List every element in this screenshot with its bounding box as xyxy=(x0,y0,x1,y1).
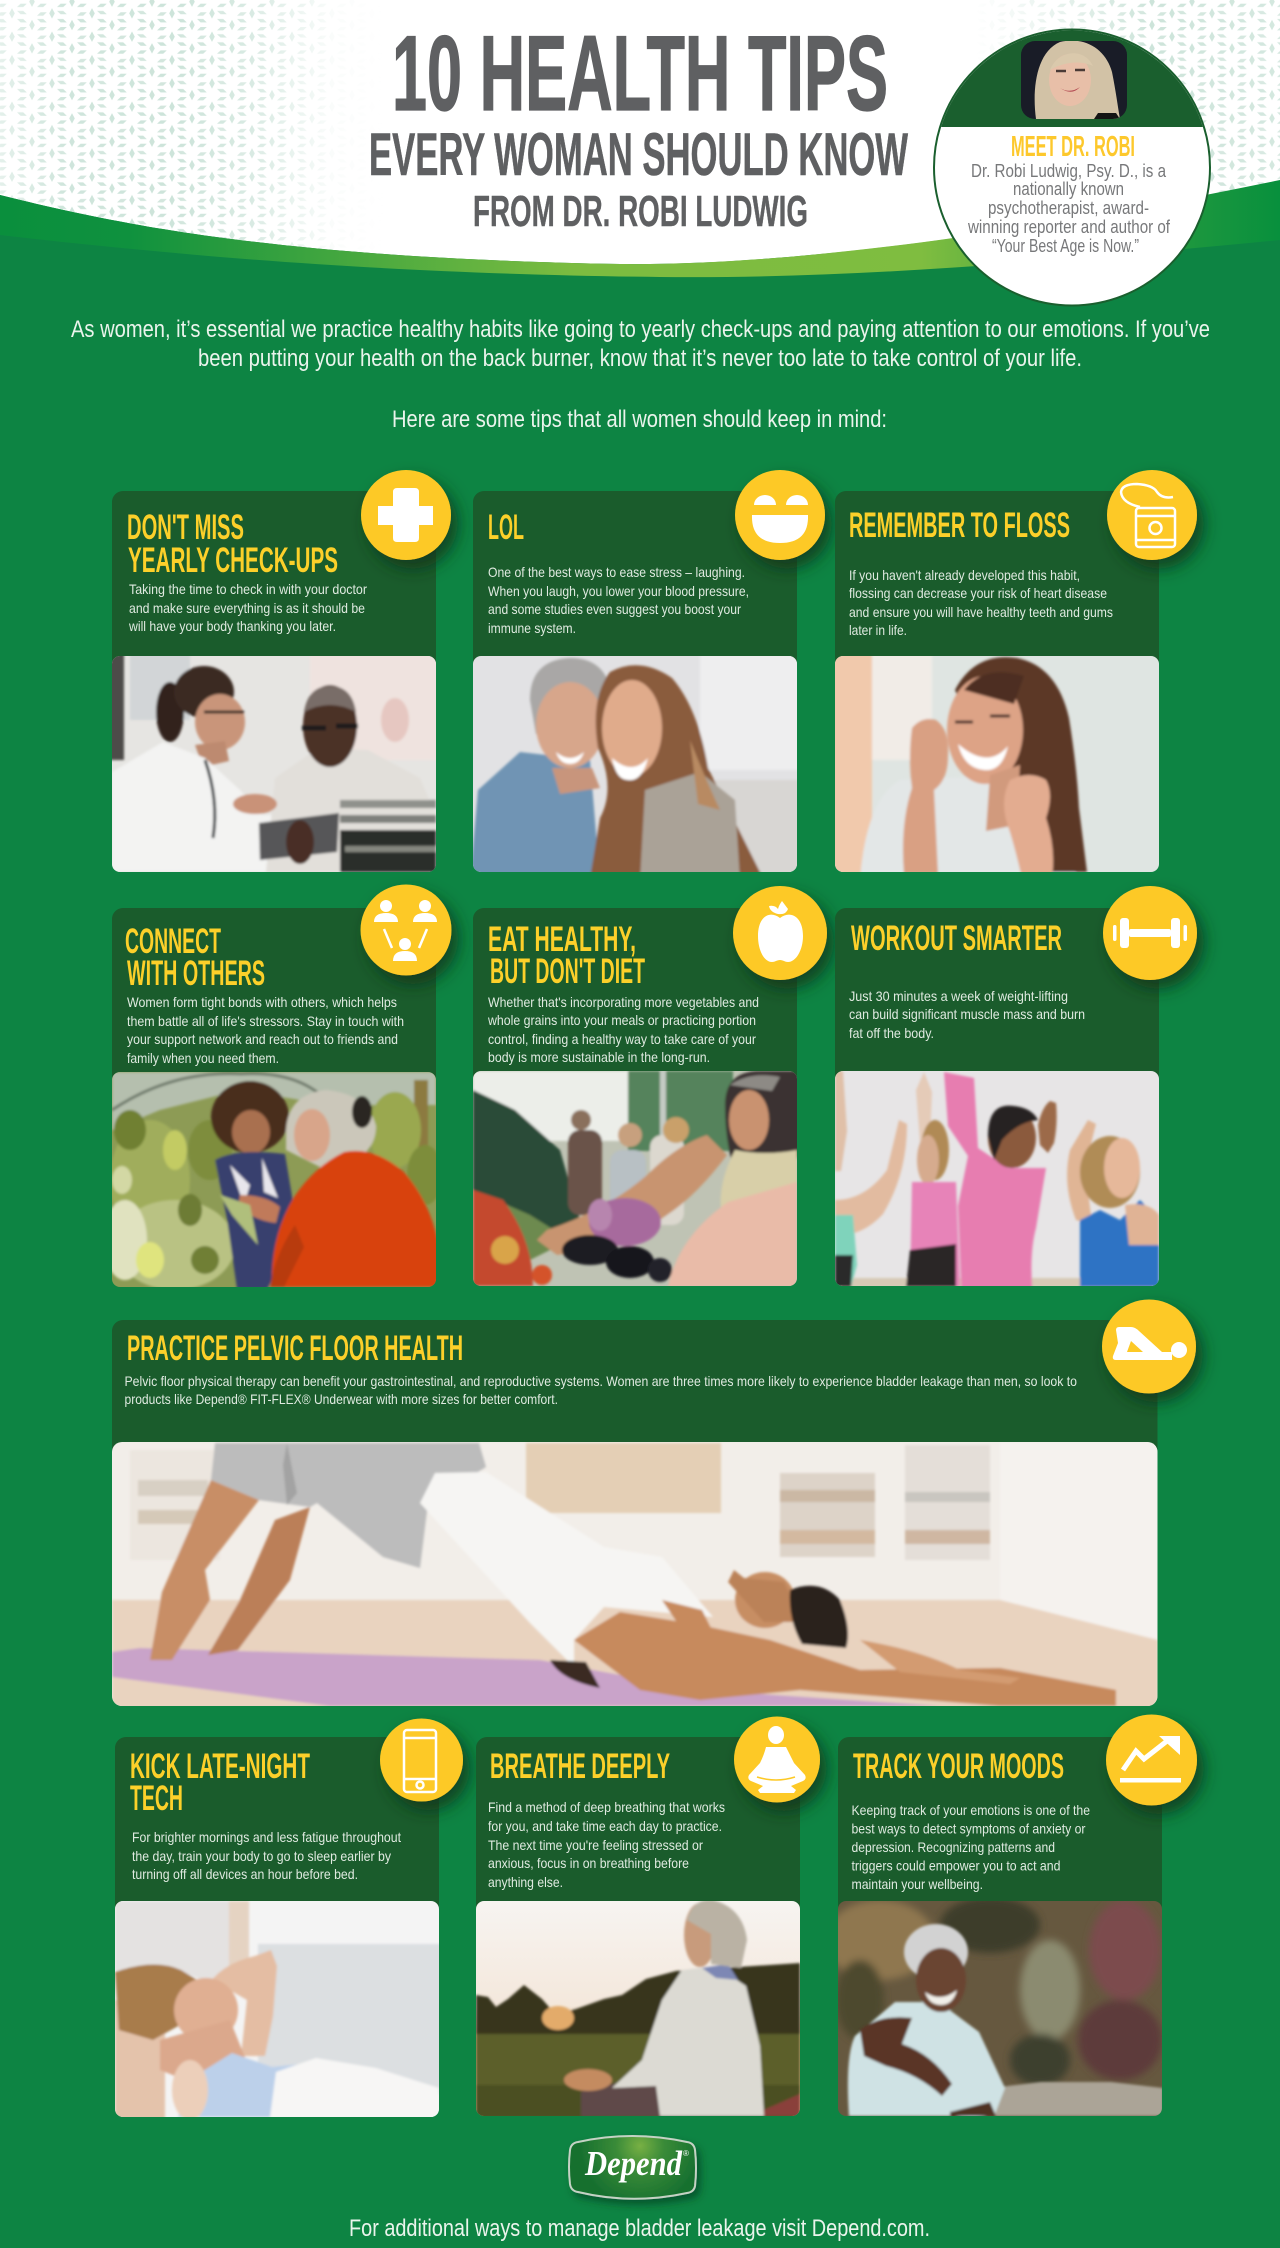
icon: smartphone xyxy=(380,1718,463,1802)
body text: Just 30 minutes a week of weight-lifting xyxy=(849,988,1068,1004)
body text: your support network and reach out to friends and xyxy=(127,1031,398,1047)
body text: anything else. xyxy=(488,1874,563,1890)
heading xyxy=(127,508,338,580)
heading: meet Dr. Robi: MEET DR. ROBI xyxy=(1011,131,1135,163)
body text: for you, and take time each day to practice. xyxy=(488,1818,722,1834)
intro text xyxy=(71,316,1210,433)
footer text: For additional ways to manage bladder leakage visit Depend.com. xyxy=(349,2215,930,2242)
photo: woman in bridge pose xyxy=(112,1442,1158,1710)
heading xyxy=(125,922,265,993)
icon: medical cross xyxy=(361,470,451,560)
heading xyxy=(130,1747,310,1818)
body text xyxy=(488,1799,725,1890)
photo: woman meditating at sunset xyxy=(476,1900,800,2119)
body text: The next time you're feeling stressed or xyxy=(488,1837,703,1853)
body text: family when you need them. xyxy=(127,1050,279,1066)
heading: YEARLY CHECK-UPS xyxy=(128,541,338,580)
heading: LOL xyxy=(488,508,524,547)
body text: them battle all of life's stressors. Stay in touch with xyxy=(127,1013,404,1029)
heading: PRACTICE PELVIC FLOOR HEALTH xyxy=(127,1329,463,1368)
panel: eat healthy xyxy=(473,886,827,1287)
photo: woman flossing xyxy=(830,650,1159,880)
body text: the day, train your body to go to sleep earlier by xyxy=(132,1848,391,1864)
body text: Women form tight bonds with others, which helps xyxy=(127,994,397,1010)
heading: KICK LATE-NIGHT xyxy=(130,1747,310,1786)
body text: and make sure everything is as it should be xyxy=(129,600,365,616)
body text xyxy=(849,988,1085,1041)
icon detail: head xyxy=(1171,1342,1187,1358)
body text: Pelvic floor physical therapy can benefit your gastrointestinal, and reproductive systems. Women are three times more likely to experience bladder leakage than men, so look to xyxy=(124,1373,1077,1389)
photo: farmers market vegetables xyxy=(473,1071,800,1287)
icon: connected people xyxy=(360,884,452,976)
photo: two women laughing xyxy=(470,650,800,880)
photo: smiling older woman xyxy=(825,1897,1163,2118)
heading: TECH xyxy=(130,1779,183,1818)
body text xyxy=(852,1802,1090,1892)
body text: control, finding a healthy way to take care of your xyxy=(488,1031,756,1047)
body text: and some studies even suggest you boost your xyxy=(488,601,741,617)
portrait photo xyxy=(1021,41,1127,119)
bio text: Dr. Robi Ludwig, Psy. D., is a xyxy=(971,161,1167,181)
body text: When you laugh, you lower your blood pressure, xyxy=(488,583,749,599)
body text: maintain your wellbeing. xyxy=(852,1876,983,1892)
bio text: psychotherapist, award- xyxy=(988,198,1149,218)
heading: TRACK YOUR MOODS xyxy=(853,1747,1064,1786)
bio text: winning reporter and author of xyxy=(967,217,1171,237)
intro text: been putting your health on the back burner, know that it’s never too late to take control of your life. xyxy=(198,345,1082,372)
body text: immune system. xyxy=(488,620,576,636)
heading: REMEMBER TO FLOSS xyxy=(849,506,1070,545)
panel: yearly check-ups xyxy=(106,470,451,872)
icon: rising chart xyxy=(1106,1714,1197,1806)
body text: For brighter mornings and less fatigue throughout xyxy=(132,1829,401,1845)
body text: fat off the body. xyxy=(849,1025,934,1041)
panel: connect with others xyxy=(103,884,452,1290)
heading: DON'T MISS xyxy=(127,508,244,547)
title xyxy=(369,13,908,236)
heading: BUT DON'T DIET xyxy=(490,952,645,991)
callout: meet Dr. Robi xyxy=(930,28,1215,306)
title: FROM DR. ROBI LUDWIG xyxy=(473,187,808,236)
body text xyxy=(127,994,404,1066)
body text: later in life. xyxy=(849,622,907,638)
logo: Depend: ® xyxy=(683,2149,689,2158)
body text: will have your body thanking you later. xyxy=(128,618,336,634)
body text: and ensure you will have healthy teeth and gums xyxy=(849,604,1113,620)
title: 10 HEALTH TIPS xyxy=(392,13,888,133)
icon: dumbbell xyxy=(1103,886,1197,980)
heading: CONNECT xyxy=(125,922,221,961)
header banner with pattern and wave xyxy=(0,0,1280,277)
title: EVERY WOMAN SHOULD KNOW xyxy=(369,121,908,188)
icon: floss container xyxy=(1107,470,1197,560)
body text: Keeping track of your emotions is one of the xyxy=(852,1802,1090,1818)
panel: pelvic floor health xyxy=(112,1300,1196,1710)
body text xyxy=(124,1373,1077,1407)
icon: apple xyxy=(733,886,827,980)
heading: BREATHE DEEPLY xyxy=(490,1747,670,1786)
body text xyxy=(487,994,759,1065)
panel: breathe deeply xyxy=(476,1716,820,2119)
body text xyxy=(128,581,367,634)
body text: If you haven't already developed this habit, xyxy=(849,567,1080,583)
body text xyxy=(132,1829,401,1882)
heading: WORKOUT SMARTER xyxy=(851,919,1062,958)
panel: track your moods xyxy=(825,1714,1197,2118)
body text: triggers could empower you to act and xyxy=(852,1858,1060,1874)
logo: Depend: Depend xyxy=(584,2144,682,2183)
panel: LOL xyxy=(470,470,825,880)
body text: Taking the time to check in with your doctor xyxy=(129,581,367,597)
body text: body is more sustainable in the long-run. xyxy=(488,1049,710,1065)
heading: WITH OTHERS xyxy=(127,954,265,993)
body text: anxious, focus in on breathing before xyxy=(488,1855,689,1871)
heading: EAT HEALTHY, xyxy=(488,920,636,959)
body text: flossing can decrease your risk of heart disease xyxy=(849,585,1107,601)
photo: gardening in greenhouse xyxy=(103,1072,443,1290)
bio text: nationally known xyxy=(1013,179,1124,199)
panel: workout smarter xyxy=(835,886,1197,1306)
icon: smiling face xyxy=(735,470,825,560)
icon: meditating figure xyxy=(734,1716,820,1802)
body text xyxy=(488,564,749,636)
body text: turning off all devices an hour before bed. xyxy=(132,1866,358,1882)
body text: best ways to detect symptoms of anxiety or xyxy=(852,1820,1086,1836)
body text: Find a method of deep breathing that works xyxy=(488,1799,725,1815)
bio text xyxy=(967,161,1171,256)
heading xyxy=(488,920,645,991)
logo: Depend xyxy=(569,2136,696,2199)
panel: kick late-night tech xyxy=(115,1718,463,2120)
panel: remember to floss xyxy=(830,470,1197,880)
photo: doctor and patient xyxy=(106,650,440,872)
body text: depression. Recognizing patterns and xyxy=(852,1839,1055,1855)
photo: women exercising xyxy=(835,1071,1159,1306)
bio text: “Your Best Age is Now.” xyxy=(992,236,1139,256)
intro text: Here are some tips that all women should keep in mind: xyxy=(392,406,887,433)
body text: Whether that's incorporating more vegetables and xyxy=(488,994,759,1010)
body text: whole grains into your meals or practicing portion xyxy=(487,1012,756,1028)
body text: One of the best ways to ease stress – laughing. xyxy=(488,564,745,580)
body text xyxy=(849,567,1113,638)
icon: bridge pose xyxy=(1102,1300,1196,1394)
photo: woman waking in bed xyxy=(115,1901,443,2120)
body text: can build significant muscle mass and burn xyxy=(849,1006,1085,1022)
body text: products like Depend® FIT-FLEX® Underwear with more sizes for better comfort. xyxy=(124,1391,558,1407)
